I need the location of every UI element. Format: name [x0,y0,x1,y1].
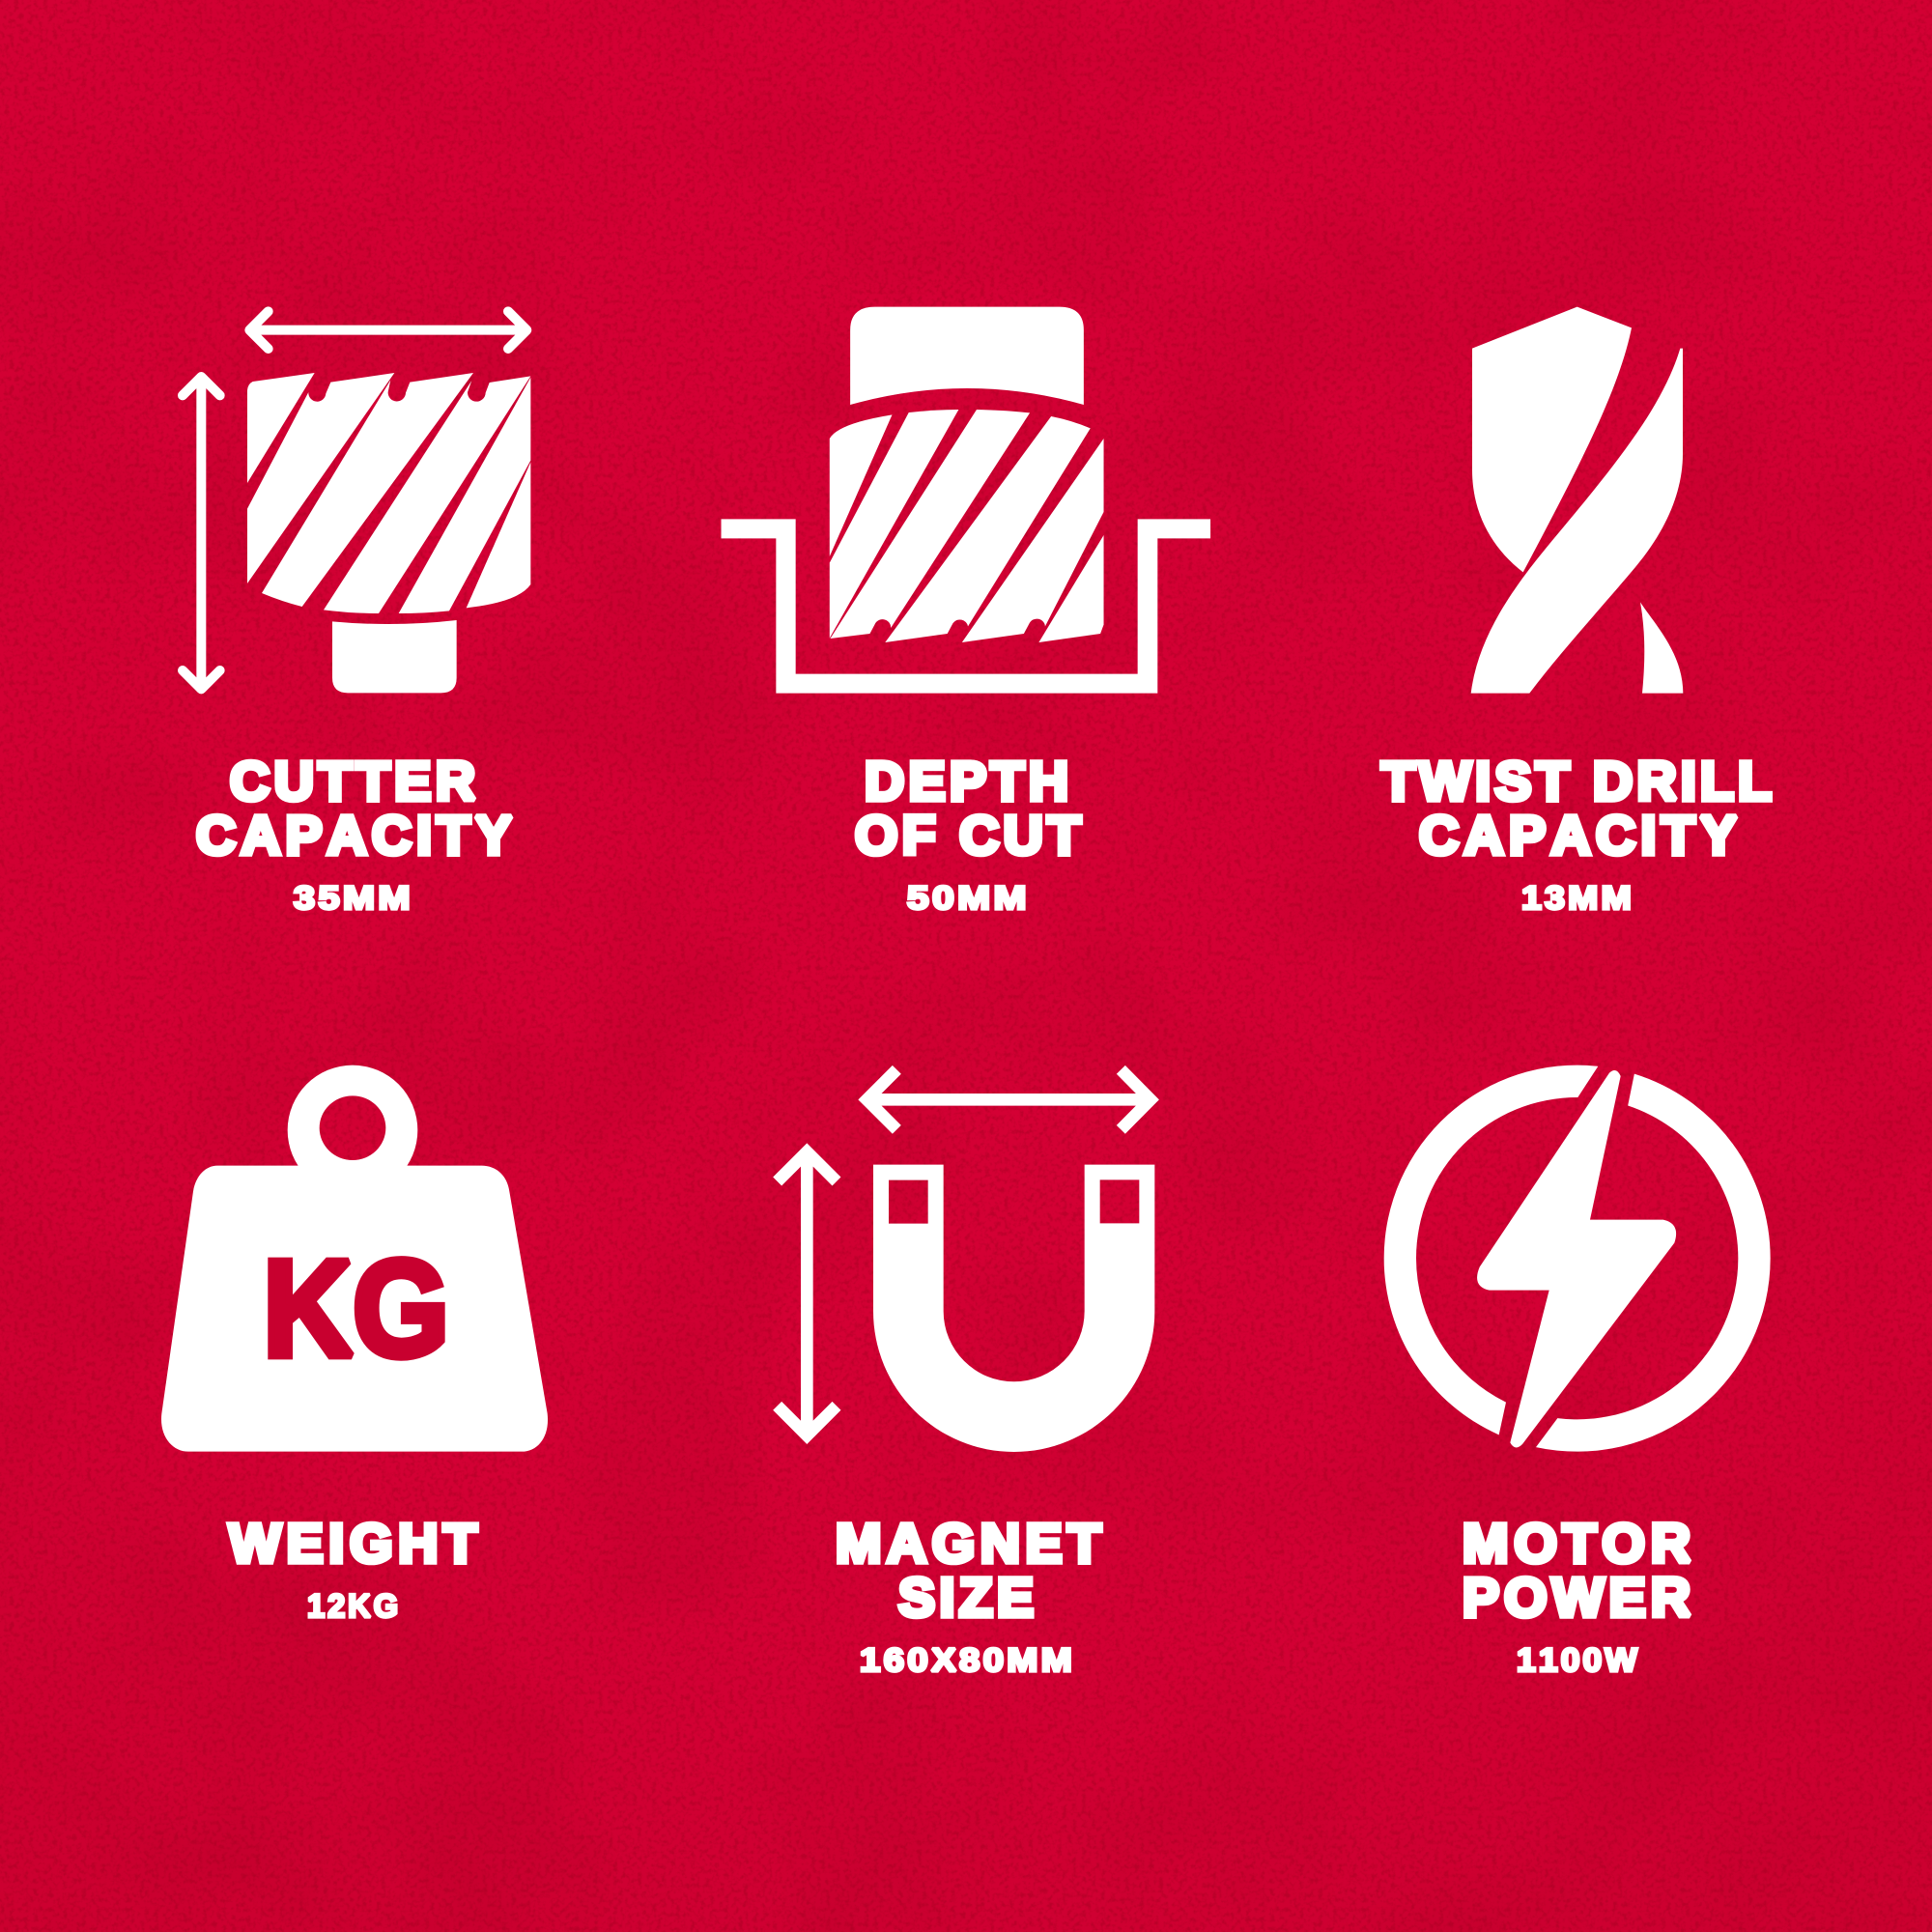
recess outline [722,519,1210,694]
icon: lightning bolt in ring [1384,1065,1771,1452]
cutter body flutes [247,373,530,613]
heading: motor power: MOTOR [1463,1513,1690,1575]
value: 160x80mm: 160X80MM [860,1642,1075,1679]
heading: depth of cut: DEPTH [865,751,1068,812]
arrow: horizontal width [867,1069,1151,1129]
heading: cutter capacity: CUTTER [230,751,475,812]
heading: magnet size: MAGNET [836,1513,1101,1575]
icon: cutter in a recess [722,307,1210,694]
value: 13mm: 13MM [1521,880,1634,917]
panel: weight [161,1065,548,1625]
cutter shank [850,307,1084,405]
heading: depth of cut: OF CUT [855,805,1081,867]
ring right arc [1536,1074,1771,1452]
panel: motor power [1384,1065,1771,1679]
heading: motor power [1463,1513,1690,1629]
arrow: horizontal width [249,311,526,349]
heading: twist drill capacity: CAPACITY [1419,805,1737,867]
heading: twist drill capacity: TWIST DRILL [1381,751,1772,812]
label: KG: KG [263,1232,449,1385]
cutter shank [332,620,457,693]
heading: twist drill capacity [1381,751,1772,867]
arrow: vertical height [183,377,220,689]
heading: cutter capacity [196,751,512,867]
panel: cutter capacity [183,311,530,917]
horseshoe magnet [873,1165,1154,1452]
value: 35mm: 35MM [294,880,413,917]
heading: weight: WEIGHT [229,1513,477,1575]
weight body [161,1166,548,1452]
heading: cutter capacity: CAPACITY [196,805,512,867]
heading: magnet size [836,1513,1101,1629]
icon: kettlebell weight [161,1065,548,1452]
value: 1100w: 1100W [1517,1642,1640,1679]
value: 12kg: 12KG [307,1588,401,1625]
value: 50mm: 50MM [907,880,1030,917]
icon: cutter with dimension arrows [183,311,530,693]
panel: twist drill capacity [1381,307,1772,917]
cutter body flutes [830,410,1104,642]
panel: magnet size [778,1069,1154,1679]
icon: horseshoe magnet with dimension arrows [778,1069,1154,1452]
icon: twist drill bit [1471,307,1683,694]
lightning bolt [1477,1070,1676,1447]
heading: motor power: POWER [1463,1567,1690,1629]
arrow: vertical height [778,1151,837,1435]
ring left arc [1384,1065,1598,1435]
weight ring [288,1065,417,1195]
heading: depth of cut [855,751,1081,867]
panel: depth of cut [722,307,1210,917]
heading: magnet size: SIZE [898,1567,1034,1629]
